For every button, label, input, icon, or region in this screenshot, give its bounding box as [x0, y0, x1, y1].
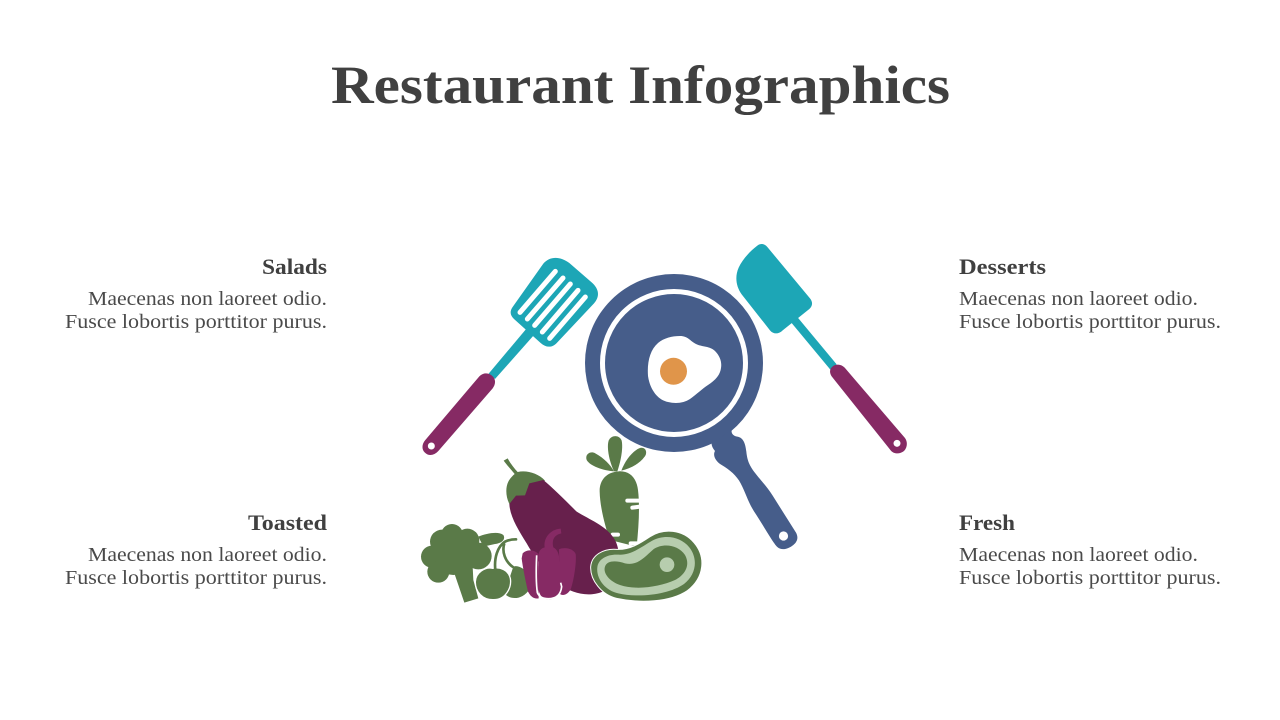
title: Restaurant Infographics	[331, 55, 950, 115]
pan body	[585, 274, 763, 452]
egg white	[648, 336, 721, 403]
eggplant stem and cap	[504, 458, 545, 505]
text block: Desserts	[959, 254, 1221, 333]
text block: Fresh	[959, 510, 1221, 589]
text block: Toasted: Maecenas non laoreet odio.	[88, 544, 327, 566]
text block: Toasted	[65, 510, 327, 589]
text block: Salads	[65, 254, 327, 333]
handle hole	[779, 531, 788, 541]
text block: Salads: Fusce lobortis porttitor purus.	[65, 311, 327, 333]
text block: Fresh: Fresh	[959, 510, 1015, 535]
text block: Fresh: Fusce lobortis porttitor purus.	[959, 567, 1221, 589]
icon: frying pan with egg	[585, 274, 797, 549]
carrot marks	[613, 501, 640, 543]
pan inner ring	[602, 292, 746, 434]
pan handle	[712, 430, 797, 549]
broccoli	[421, 524, 504, 603]
text block: Desserts: Maecenas non laoreet odio.	[959, 288, 1198, 310]
text block: Desserts: Desserts	[959, 254, 1046, 279]
bell pepper	[522, 529, 576, 599]
icon: slotted spatula	[422, 258, 598, 455]
text block: Salads: Maecenas non laoreet odio.	[88, 288, 327, 310]
cherries	[475, 539, 531, 600]
eggplant body	[509, 480, 619, 594]
text block: Salads: Salads	[262, 254, 327, 279]
icon: vegetables and steak	[421, 436, 702, 603]
carrot	[586, 436, 646, 547]
egg yolk	[660, 358, 687, 385]
icon: spatula scraper	[736, 244, 907, 453]
text block: Fresh: Maecenas non laoreet odio.	[959, 544, 1198, 566]
steak	[591, 531, 702, 601]
text block: Desserts: Fusce lobortis porttitor purus.	[959, 311, 1221, 333]
text block: Toasted: Toasted	[248, 510, 327, 535]
text block: Toasted: Fusce lobortis porttitor purus.	[65, 567, 327, 589]
